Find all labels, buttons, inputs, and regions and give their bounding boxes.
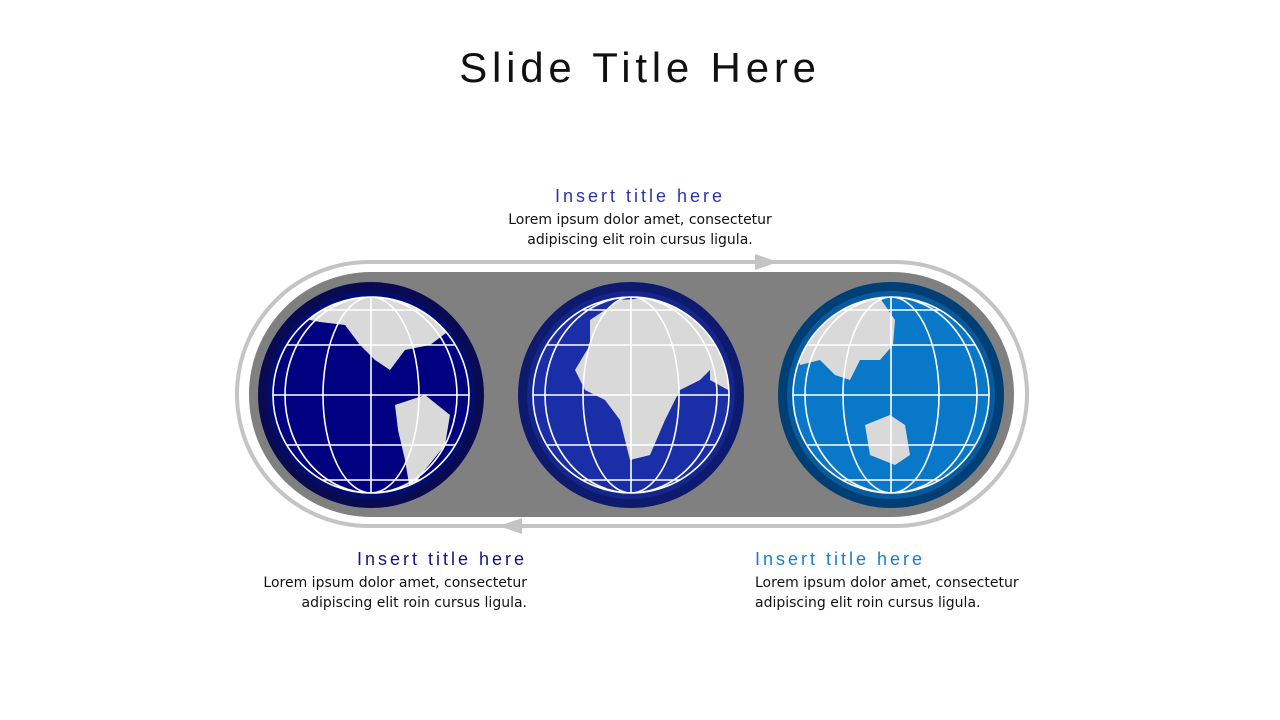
diagram (235, 254, 1029, 534)
text block: top: adipiscing elit roin cursus ligula. (527, 232, 753, 248)
globe 3: Asia/Australia (778, 282, 1004, 508)
text block: bottom right: adipiscing elit roin cursus ligula. (755, 595, 980, 611)
text block: bottom left: Insert title here (357, 549, 527, 569)
text block: bottom right: Insert title here (755, 549, 925, 569)
title: Slide Title Here (459, 44, 821, 91)
text block: bottom right (755, 549, 1019, 611)
text block: top: Insert title here (555, 186, 725, 206)
globe 2: Africa/Europe (518, 282, 744, 508)
globe 1: Americas (258, 282, 484, 508)
gray pill (249, 272, 1014, 517)
text block: bottom left: Lorem ipsum dolor amet, consectetur (263, 575, 527, 591)
loop track with arrows (237, 254, 1027, 534)
text block: bottom right: Lorem ipsum dolor amet, consectetur (755, 575, 1019, 591)
text block: top (508, 186, 772, 248)
text block: bottom left (263, 549, 527, 611)
text block: bottom left: adipiscing elit roin cursus ligula. (302, 595, 527, 611)
text block: top: Lorem ipsum dolor amet, consectetur (508, 212, 772, 228)
